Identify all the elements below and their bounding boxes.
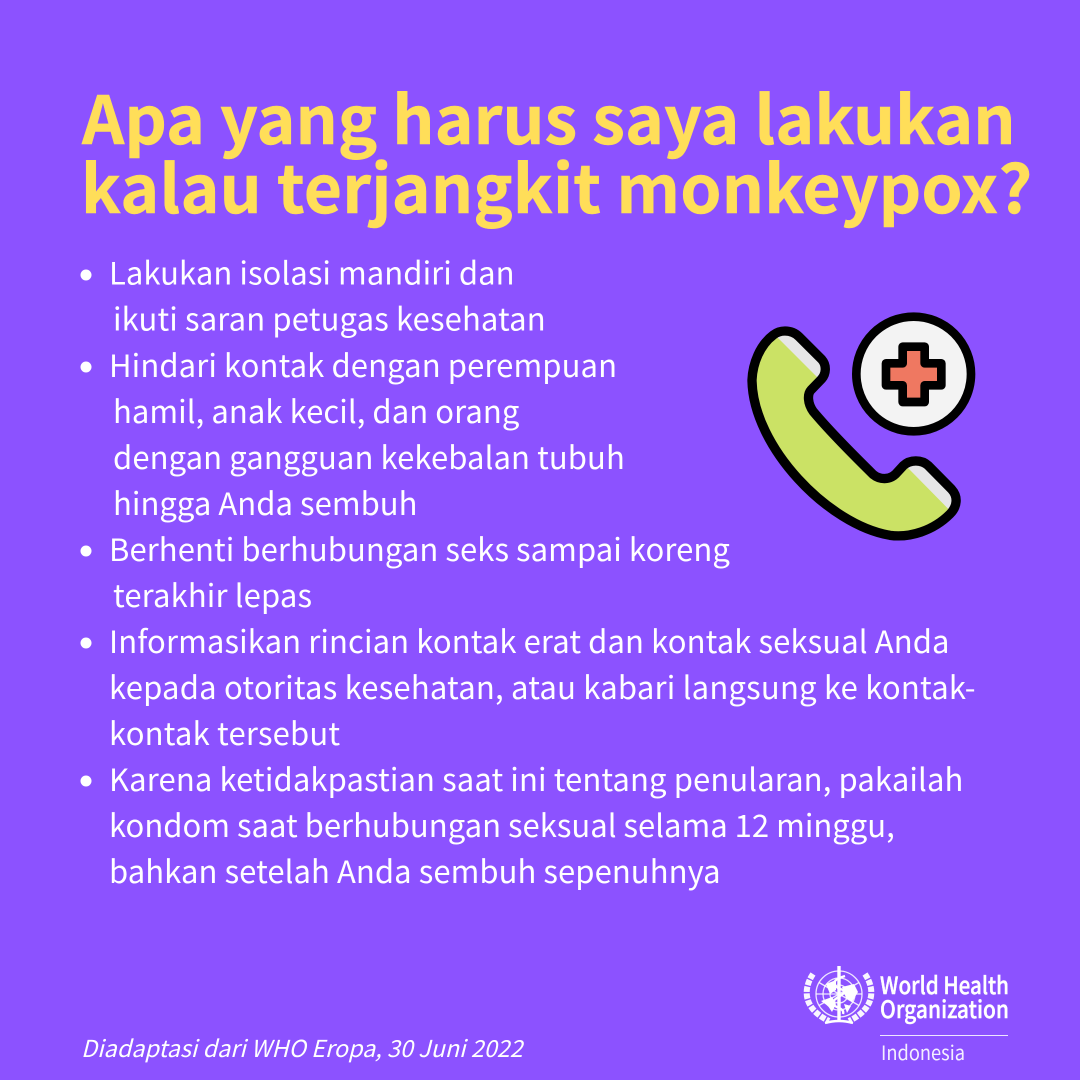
title	[81, 68, 1032, 233]
bullet item 5	[80, 755, 963, 892]
logo: country label: Indonesia	[881, 1037, 965, 1066]
bullet list	[80, 248, 976, 892]
bullet item 2: hamil, anak kecil, dan orang	[113, 387, 520, 432]
bullet item 5: Karena ketidakpastian saat ini tentang penularan, pakailah	[109, 755, 963, 800]
logo: World Health Organization wordmark: Organization	[880, 990, 1009, 1025]
bullet item 4: kontak tersebut	[109, 709, 340, 754]
bullet item 5: bahkan setelah Anda sembuh sepenuhnya	[109, 847, 721, 892]
bullet item 1: Lakukan isolasi mandiri dan	[109, 248, 515, 294]
bullet item 2: dengan gangguan kekebalan tubuh	[113, 433, 625, 478]
bullet item 3: Berhenti berhubungan seks sampai koreng	[109, 525, 730, 570]
logo divider	[880, 1035, 1008, 1036]
bullet item 2	[80, 341, 625, 524]
globe land shapes	[821, 980, 858, 1013]
bullet item 5: kondom saat berhubungan seksual selama 12 minggu,	[109, 801, 895, 846]
title: kalau terjangkit monkeypox?	[81, 137, 1032, 233]
staff and serpent	[833, 966, 845, 1020]
bullet item 1	[80, 248, 546, 340]
bullet item 3: terakhir lepas	[113, 571, 312, 616]
icon: phone handset	[752, 320, 970, 536]
title: Apa yang harus saya lakukan	[81, 68, 1016, 164]
bullet item 4	[80, 617, 976, 754]
bullet item 4: Informasikan rincian kontak erat dan kontak seksual Anda	[109, 617, 950, 662]
icon: phone with medical cross	[752, 317, 971, 536]
logo: World Health Organization wordmark	[880, 966, 1009, 1025]
logo: World Health Organization wordmark: World Health	[880, 966, 1009, 1001]
bullet item 1: ikuti saran petugas kesehatan	[113, 294, 546, 340]
bullet item 2: hingga Anda sembuh	[113, 479, 418, 524]
laurel wreath	[807, 974, 871, 1021]
globe	[816, 971, 862, 1017]
icon: medical cross badge	[856, 317, 971, 431]
bullet item 3	[80, 525, 730, 616]
logo: WHO emblem	[807, 966, 871, 1023]
bullet item 2: Hindari kontak dengan perempuan	[109, 341, 617, 386]
bullet item 4: kepada otoritas kesehatan, atau kabari langsung ke kontak-	[109, 663, 976, 708]
source note: Diadaptasi dari WHO Eropa, 30 Juni 2022	[81, 1030, 525, 1064]
